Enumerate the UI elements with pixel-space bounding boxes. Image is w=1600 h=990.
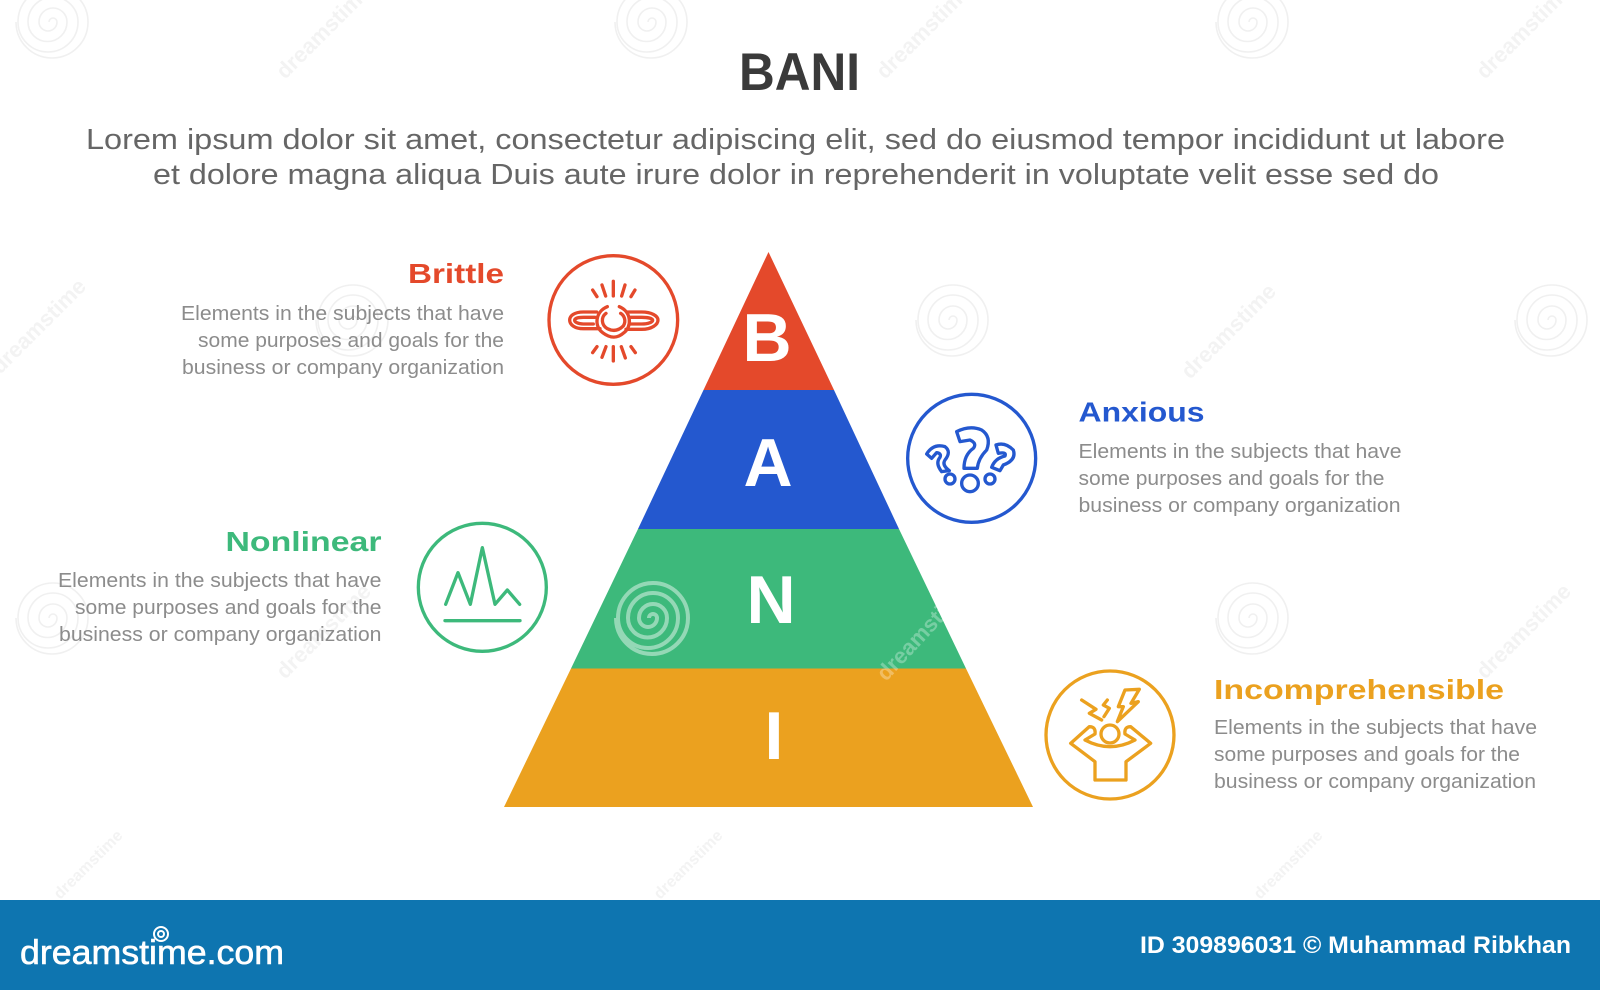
anxious description <box>1078 441 1402 517</box>
pyramid layer N <box>571 529 966 668</box>
background watermark: dreamstime <box>51 827 126 903</box>
brittle description: Elements in the subjects that have <box>181 303 504 325</box>
letter I: I <box>765 698 783 774</box>
subtitle: Lorem ipsum dolor sit amet, consectetur adipiscing elit, sed do eiusmod tempor incididunt ut labore <box>86 124 1505 156</box>
anxious description: Elements in the subjects that have <box>1078 441 1402 463</box>
anxious description: some purposes and goals for the <box>1078 468 1384 490</box>
title: BANI <box>739 43 860 102</box>
incomprehensible description: Elements in the subjects that have <box>1214 717 1537 739</box>
anxious description: business or company organization <box>1078 495 1400 517</box>
logo spiral <box>154 927 168 941</box>
pyramid layer A <box>638 390 899 529</box>
background watermark: dreamstime <box>1471 579 1576 684</box>
brittle description <box>181 303 504 379</box>
nonlinear description <box>58 570 382 646</box>
letter A: A <box>743 425 793 501</box>
panel: brittle <box>181 256 678 384</box>
brittle description: some purposes and goals for the <box>198 330 504 352</box>
incomprehensible description: business or company organization <box>1214 771 1536 793</box>
panel: anxious <box>908 394 1402 522</box>
pyramid layer B <box>704 252 834 390</box>
pyramid watermark text: dreamstime <box>871 578 974 685</box>
pyramid <box>504 252 1033 807</box>
pyramid watermark <box>616 583 688 654</box>
nonlinear heading: Nonlinear <box>226 526 382 557</box>
incomprehensible heading: Incomprehensible <box>1214 674 1504 705</box>
pyramid layer I <box>504 668 1033 807</box>
footer banner <box>0 900 1600 990</box>
icon: volatile line chart <box>418 523 546 651</box>
icon: broken chain <box>549 256 678 384</box>
icon: stressed person <box>1046 671 1174 799</box>
incomprehensible description: some purposes and goals for the <box>1214 744 1520 766</box>
brittle description: business or company organization <box>182 357 504 379</box>
dreamstime logo: dreamstime.com <box>20 934 284 972</box>
background watermark: dreamstime <box>1251 827 1326 903</box>
anxious heading: Anxious <box>1078 396 1204 428</box>
brittle heading: Brittle <box>408 258 504 289</box>
subtitle <box>86 124 1505 191</box>
background watermark: dreamstime <box>1176 279 1281 384</box>
letter N: N <box>746 562 796 638</box>
background watermark: dreamstime <box>651 827 726 903</box>
nonlinear description: some purposes and goals for the <box>75 597 382 619</box>
panel: nonlinear <box>58 523 546 651</box>
nonlinear description: business or company organization <box>59 624 382 646</box>
panel: incomprehensible <box>1046 671 1537 799</box>
background watermark: dreamstime <box>271 579 376 684</box>
subtitle: et dolore magna aliqua Duis aute irure dolor in reprehenderit in voluptate velit esse sed do <box>153 159 1439 191</box>
nonlinear description: Elements in the subjects that have <box>58 570 382 592</box>
letter B: B <box>742 300 792 376</box>
incomprehensible description <box>1214 717 1537 793</box>
icon: question marks <box>908 394 1036 522</box>
image id and author: ID 309896031 © Muhammad Ribkhan <box>1140 932 1571 959</box>
